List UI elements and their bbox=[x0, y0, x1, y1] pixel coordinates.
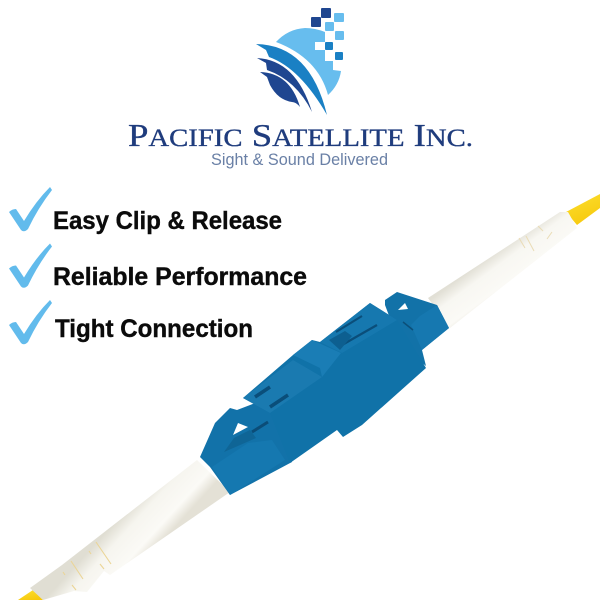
adapter silhouette and main body bbox=[243, 303, 426, 463]
lower white boot bbox=[30, 460, 230, 600]
upper connector bbox=[385, 292, 449, 366]
logo: pixel squares bbox=[311, 8, 344, 60]
logo icon bbox=[256, 8, 344, 115]
logo: light blue globe bbox=[276, 28, 341, 95]
upper white boot bbox=[428, 212, 577, 328]
feature: tight connection: Tight Connection bbox=[55, 315, 253, 343]
adapter top plate and clip bbox=[293, 303, 397, 377]
feature: reliable performance: Reliable Performance bbox=[53, 263, 307, 291]
check icon 1 bbox=[9, 187, 52, 231]
lower yellow fiber cable bbox=[18, 590, 43, 600]
upper yellow fiber cable bbox=[566, 194, 600, 225]
logo: swoosh bands bbox=[256, 44, 327, 115]
check icon 2 bbox=[9, 244, 52, 288]
check icon 3 bbox=[9, 300, 52, 344]
company name: PACIFIC SATELLITE INC. bbox=[128, 117, 473, 153]
tagline: Sight & Sound Delivered bbox=[211, 151, 388, 169]
adapter rear sleeve bbox=[243, 360, 322, 413]
blue LC adapter bbox=[200, 292, 449, 495]
lower connector bbox=[200, 402, 292, 495]
feature: easy clip: Easy Clip & Release bbox=[53, 207, 282, 235]
